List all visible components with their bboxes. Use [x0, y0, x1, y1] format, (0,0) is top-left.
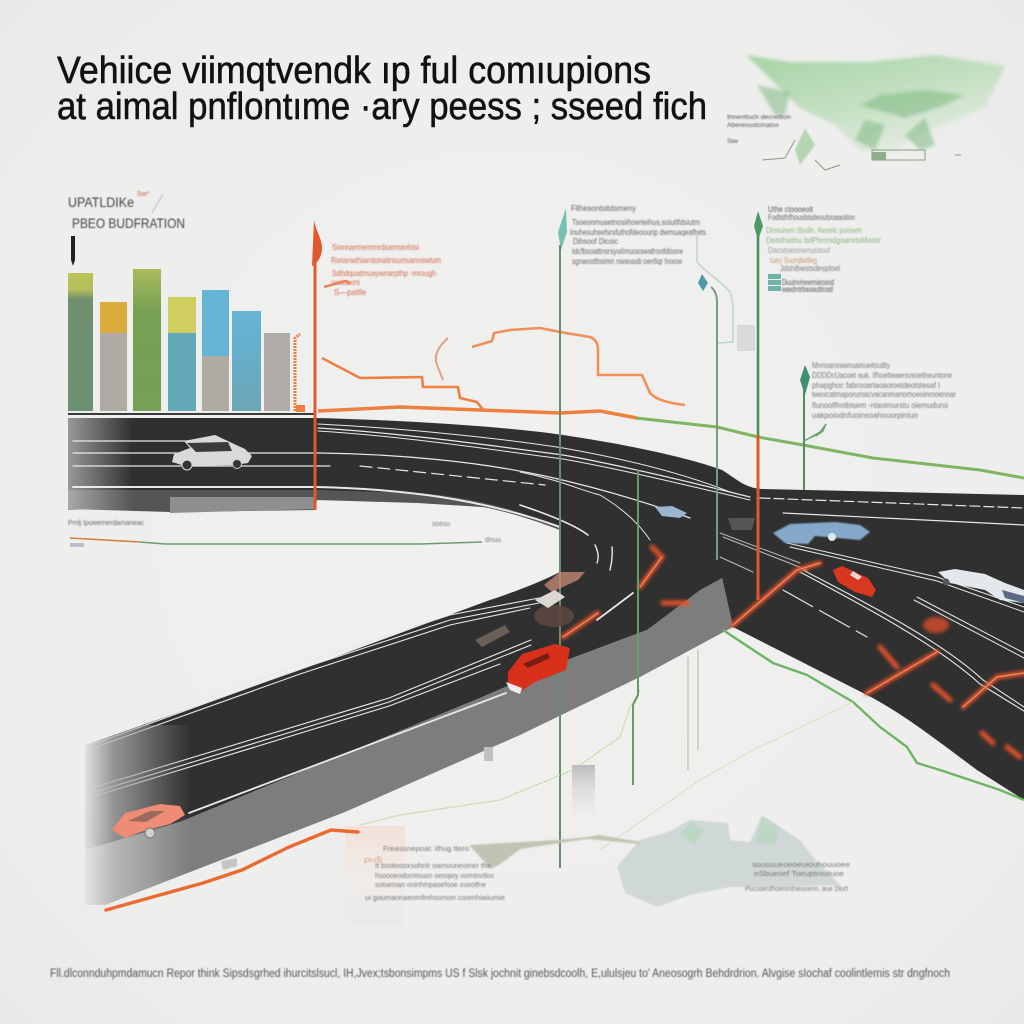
- chart heading: Soe*: [137, 191, 149, 198]
- icon: small teal stack: [768, 274, 781, 291]
- bar chart: [68, 269, 290, 411]
- car: red centre: [506, 644, 570, 694]
- text block: bottom centre: Freasonepoat: ithug ttero: [383, 844, 469, 853]
- road labels and legend line: dnuu: [485, 535, 501, 544]
- road: shoulder grey bands: [68, 490, 733, 905]
- text block: bottom centre: hsoooeodomtouon oeoqioy oomtovtlos: [375, 871, 494, 880]
- text block: red annotation: Sdhdquatmuaywnarpthp ·mrough: [332, 268, 436, 278]
- pillars under ramp: [221, 747, 595, 870]
- text block: right: [812, 361, 956, 420]
- text block: upper right: Dinnuiwm IIbuiln, Aeoeic poiowm: [766, 226, 862, 235]
- text block: right: twexcatmaporumacvacanmanomoeoinmoennar: [812, 390, 956, 399]
- marker pole: green and red: [754, 211, 763, 600]
- map: world inset top right: Aberessotcinatos: [727, 122, 780, 129]
- text block: red annotation: S—patlle: [334, 287, 366, 297]
- text block: red annotation: Ronanwthiarntonaitnoumuanoswtum: [331, 255, 441, 265]
- footer text: Fll.dlconnduhpmdamucn Repor think Sipsdsgrhed ihurcitslsucl, IH,Jvex;tsbonsimpms US f Slsk jochnit ginebsdcoolh, E,ululsjeu to' Aneosogrh Behdrdrion. Alvgise sIochaf coolintlernis str dngfnoch: [50, 968, 950, 980]
- car: white left: [172, 435, 252, 470]
- text block: bottom centre: [364, 844, 505, 902]
- map: world inset top right: Ihnenttsch decrettion: [727, 114, 791, 121]
- road: lane markings: [73, 424, 1024, 813]
- text block: upper right: Uthe ctoooeoit: [768, 205, 814, 214]
- orange stepped trend lines: [295, 281, 685, 418]
- text block: upper centre: Fllhesontsitdsmeny: [571, 204, 637, 213]
- chart heading: PBEO BUDFRATION: [72, 215, 185, 231]
- lower green and dotted lines: [360, 470, 1024, 850]
- text block: upper right: [766, 205, 881, 294]
- text block: upper centre: sgnwootfosimn nwaoasb oenfiqr hoxoe: [572, 257, 682, 266]
- text block: upper right: Dacstoeomenuotouf: [768, 246, 831, 255]
- car: wreck centre: [475, 572, 585, 647]
- map: lower continent shape: [470, 815, 840, 907]
- car: white right: [938, 569, 1024, 603]
- text block: upper right: Deisthsithu bdPhrrmdgswnrtsMesitr: [766, 236, 881, 245]
- chart heading: [68, 191, 185, 231]
- road base line under bars: [68, 413, 315, 415]
- text block: bottom map: oSbueoef Toeuptroutuoe: [754, 871, 844, 878]
- road: dark carriageway: [68, 418, 1024, 850]
- road: upper left edge fade: [68, 418, 133, 512]
- text block: bottom map: Pucuoesthoerontneuoenn. aue Dlurt: [745, 886, 848, 893]
- car: blue large: [728, 518, 870, 544]
- car: pink lower: [112, 804, 185, 838]
- text block: bottom centre: ui goumannaeomfmhsomon coomhiaiiumie: [365, 893, 505, 902]
- map: world inset top right: Slaw: [727, 138, 738, 145]
- text block: right: DDDDcUacoet auk. Ifhoetteaersvsoetheuntone: [812, 371, 952, 380]
- title: at aimal pnﬂontıme ·ary peess ; sseed fich: [57, 86, 707, 128]
- text block: right: Mnnoanswanuainueitsutlty: [812, 361, 890, 370]
- title: Vehiice viimqtvendk ıp ful comıupions: [57, 50, 651, 92]
- road labels and legend line: [68, 518, 501, 547]
- text block: upper right: Jdshibwstsdesptoel: [780, 264, 840, 273]
- teal diamond marker and connector: [697, 232, 755, 560]
- red speed streaks: [563, 547, 1024, 757]
- car: small blue: [655, 506, 687, 518]
- road labels and legend line: Pmlj Ipuwemerdamaneac: [68, 518, 144, 527]
- text block: upper centre: Tsoeonmuaetnosiihoerteihus,soiutlfdsiutm: [572, 218, 700, 227]
- text block: bottom centre: pu§: [364, 855, 382, 864]
- text block: upper centre: [570, 204, 706, 266]
- text block: right: flunoolfhotbisem -nlaoimurstu oiemuduroi: [812, 401, 948, 410]
- text block: upper centre: Dihsoof Dicoic: [573, 237, 618, 246]
- text block: upper right: Fodtsthfhousbisdeoutsoaaotion: [768, 213, 855, 222]
- text block: right: phapghoc fabrooartaoaoioetdeotstesaf I: [812, 381, 940, 390]
- marker pole: right green: [800, 365, 826, 490]
- text block: red annotation: Sionnarmenrmrdsarmanhtsi: [332, 242, 419, 252]
- marker pole: teal flag: [558, 208, 567, 868]
- text block: upper centre: IdcfbsoattnsrsyoiImuosswafroofdlosre: [572, 247, 683, 256]
- title: [57, 50, 707, 128]
- text block: bottom map: sousuueoeoeuiouhouuoee: [752, 862, 850, 869]
- orange red pole: [312, 220, 322, 510]
- text block: bottom centre: sotoeman oninhmpaoefooe oseotfne: [375, 880, 486, 889]
- green trend line: [636, 418, 1024, 478]
- text block: upper right: Diuuinvinewmiaroaod: [782, 278, 834, 287]
- text block: bottom map: [745, 862, 850, 893]
- text block: upper right: waedmtrbaoiauttiroatl: [781, 285, 833, 294]
- orange lower line: [106, 826, 405, 926]
- map: world inset top right: [727, 55, 1005, 170]
- text block: right: uakpoiodnfuoinsoahouorpiniuo: [812, 411, 919, 420]
- text block: red annotation: uwstuoors: [331, 277, 360, 287]
- car: red right: [833, 566, 876, 597]
- marker: black pin: [71, 236, 75, 266]
- chart heading: UPATLDIKe: [68, 194, 134, 210]
- text block: upper right: tuey Soonjbelleg: [770, 256, 817, 265]
- text block: red annotation: [331, 242, 441, 297]
- text block: upper centre: Inuhesuhsefsrsfuthofdeoourip dwmuaqeaftwts: [570, 228, 706, 237]
- text block: bottom centre: It bsotoooxsohnlr oamouneoiner the: [375, 861, 491, 870]
- road labels and legend line: soeuu: [432, 519, 450, 528]
